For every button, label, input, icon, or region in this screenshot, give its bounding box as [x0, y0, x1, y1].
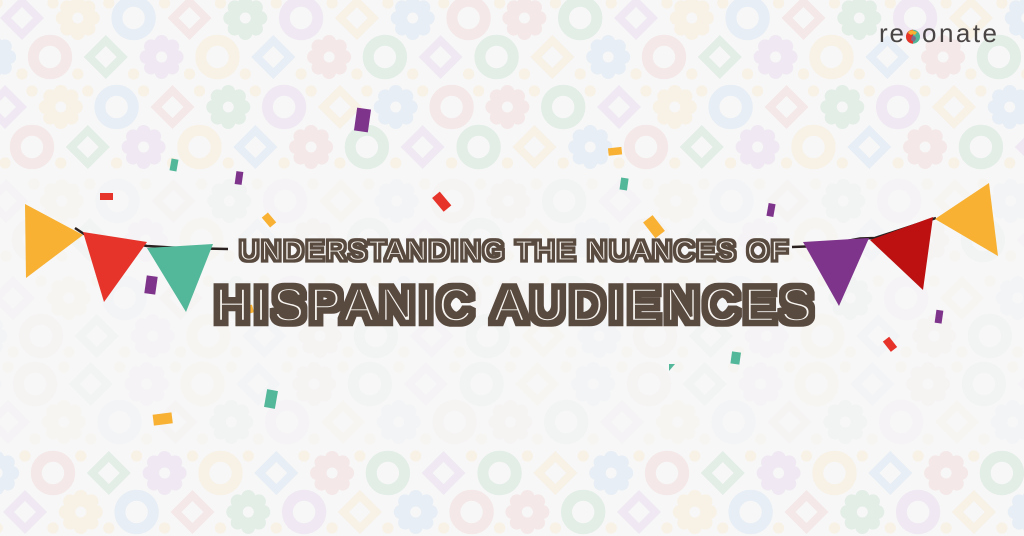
flag: red [83, 232, 147, 302]
flag: purple [803, 238, 869, 306]
flag: orange [935, 183, 998, 256]
logo: resonate: re [879, 18, 904, 48]
left bunting [25, 204, 228, 312]
logo: resonate: onate [922, 18, 997, 48]
flag: dark red [870, 217, 933, 290]
logo: resonate [879, 18, 997, 48]
title line 1: UNDERSTANDING THE NUANCES OF [239, 235, 788, 266]
icon: logo swirl [906, 30, 920, 44]
title line 2: HISPANIC AUDIENCES [215, 278, 812, 331]
flag: green [147, 244, 213, 312]
central fade band [0, 172, 1024, 450]
right bunting [792, 183, 998, 306]
flag: orange [25, 204, 83, 278]
confetti [100, 108, 943, 426]
